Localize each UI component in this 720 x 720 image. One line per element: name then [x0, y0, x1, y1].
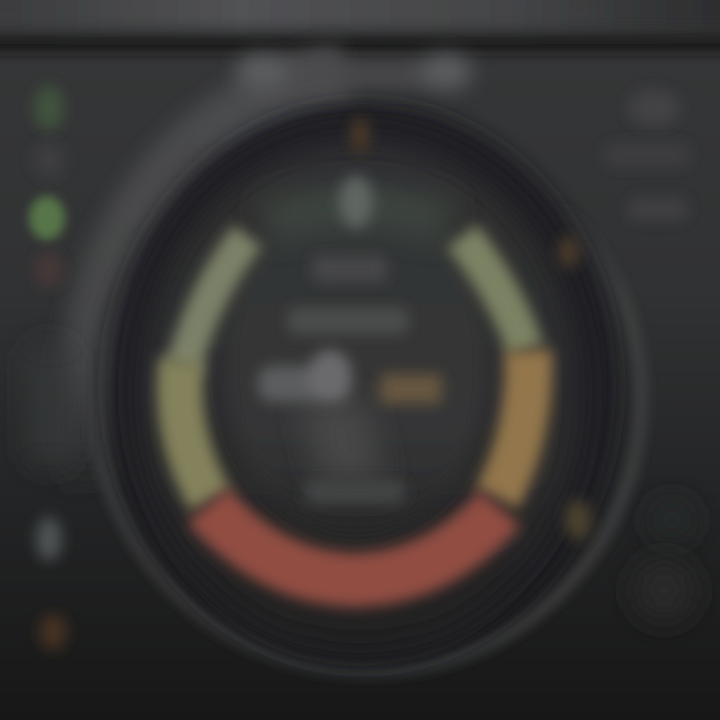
- top triangle marker: [339, 176, 373, 228]
- label 5: [634, 560, 694, 620]
- small dial markers: [558, 236, 591, 540]
- marker upper right: [558, 236, 580, 268]
- bottom text: [305, 480, 405, 504]
- label 4: [650, 500, 694, 540]
- dark channel: [108, 103, 616, 667]
- amber value: [380, 374, 442, 404]
- label 1: [628, 90, 680, 126]
- label 3: [628, 198, 688, 220]
- center column: [300, 400, 385, 480]
- text line 1: [312, 256, 387, 282]
- label 2: [604, 144, 690, 166]
- orange top tick: [350, 118, 370, 152]
- green light bright: [29, 196, 65, 240]
- segment: bottom red: [208, 505, 500, 580]
- lower grey bar: [30, 345, 70, 465]
- segment: upper-right pale green: [462, 236, 526, 350]
- grey light: [36, 517, 62, 561]
- center readout: [258, 118, 442, 504]
- light upper-left bezel: [88, 76, 345, 490]
- segment: right amber: [497, 350, 528, 498]
- green light dim: [34, 86, 64, 130]
- right label column: [604, 90, 694, 620]
- segment: left olive yellow: [180, 360, 210, 500]
- left indicator column: [29, 86, 70, 650]
- segment: upper-left pale green: [183, 236, 248, 368]
- inner dial face: [138, 139, 582, 651]
- grey label: [33, 142, 65, 178]
- colour gauge ring: [180, 206, 528, 580]
- thin lower ring: [95, 125, 641, 671]
- text line 2: [288, 308, 408, 334]
- main value: [258, 350, 352, 402]
- red light: [35, 253, 63, 287]
- top green glow: [265, 206, 450, 222]
- gauge inner disk: [224, 193, 488, 537]
- outer dial ring: [88, 76, 641, 671]
- blurred title bar: [236, 54, 472, 90]
- marker lower right: [565, 500, 591, 540]
- top header band: [0, 0, 720, 51]
- orange light: [39, 614, 67, 650]
